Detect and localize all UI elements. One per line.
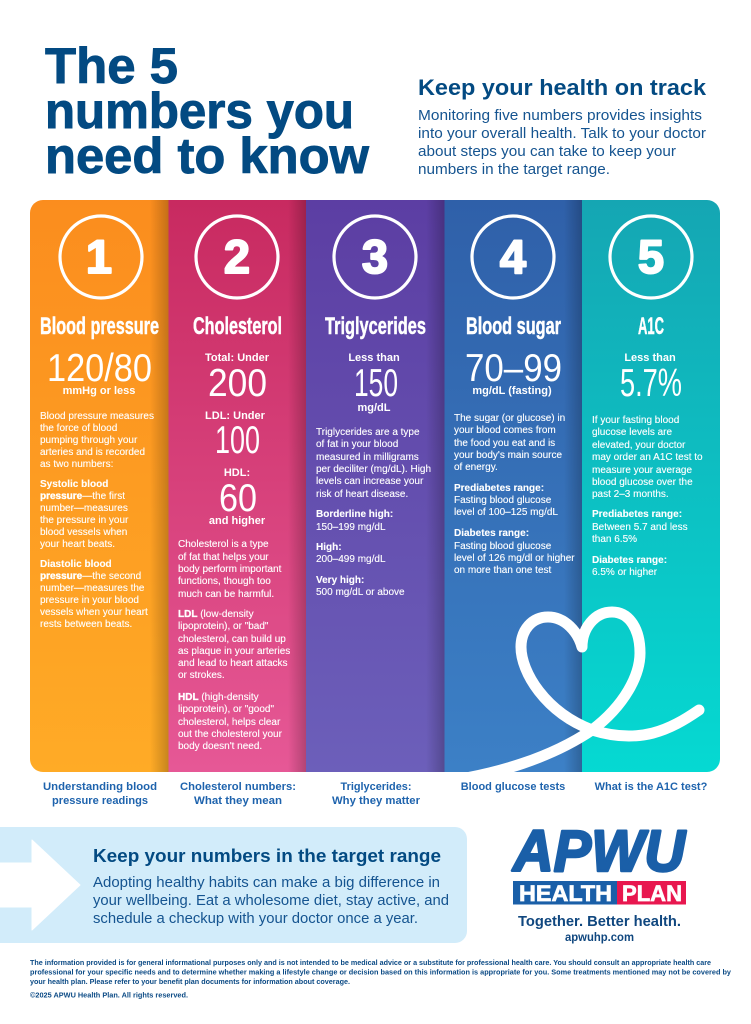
number badge 1: 1 <box>86 230 112 283</box>
website: apwuhp.com <box>565 930 634 944</box>
icon: heart ribbon <box>468 606 704 772</box>
body text: number—measures the <box>40 583 145 594</box>
body text: much can be harmful. <box>178 589 274 600</box>
body text: LDL (low-density <box>178 609 254 620</box>
callout text: your wellbeing. Eat a wholesome diet, stay active, and <box>93 893 449 909</box>
body text: cholesterol, can build up <box>178 634 286 645</box>
number badge 3: 3 <box>362 230 388 283</box>
body text <box>454 413 575 576</box>
body text: levels can increase your <box>316 476 424 487</box>
body text: cholesterol, helps clear <box>178 717 281 728</box>
target: triglycerides: mg/dL <box>358 402 391 414</box>
body text: High: <box>316 542 342 553</box>
callout: target range <box>0 827 467 943</box>
body text: out the cholesterol your <box>178 729 283 740</box>
body text: elevated, your doctor <box>592 440 686 451</box>
link: triglycerides: Triglycerides: <box>340 781 412 793</box>
body text: and lead to heart attacks <box>178 658 288 669</box>
body text: vessels when your heart <box>40 607 148 618</box>
body text: per deciliter (mg/dL). High <box>316 464 431 475</box>
number badge 3 <box>334 216 416 298</box>
body text: number—measures <box>40 503 128 514</box>
body text: pressure—the second <box>40 571 141 582</box>
body text: may order an A1C test to <box>592 452 703 463</box>
body text: the food you eat and is <box>454 438 555 449</box>
intro paragraph: numbers in the target range. <box>418 162 610 178</box>
link: triglycerides <box>332 781 421 807</box>
body text: 200–499 mg/dL <box>316 554 386 565</box>
link: blood glucose: Blood glucose tests <box>461 781 565 793</box>
body text: functions, though too <box>178 576 271 587</box>
title: need to know <box>45 128 369 184</box>
body text: Fasting blood glucose <box>454 495 552 506</box>
body text <box>316 427 431 598</box>
body text: glucose levels are <box>592 427 672 438</box>
body text: lipoprotein), or "bad" <box>178 621 269 632</box>
body text: If your fasting blood <box>592 415 679 426</box>
panel: triglycerides <box>316 216 431 598</box>
body text: on more than one test <box>454 565 552 576</box>
intro text block <box>418 75 707 178</box>
heading: blood sugar: Blood sugar <box>466 313 561 340</box>
target: A1C <box>620 352 682 405</box>
link: cholesterol: Cholesterol numbers: <box>180 781 296 793</box>
heading: triglycerides: Triglycerides <box>325 313 426 340</box>
title: numbers you <box>45 83 354 139</box>
body text: 6.5% or higher <box>592 567 658 578</box>
callout text <box>93 875 449 927</box>
target: LDL: LDL: Under <box>205 410 266 422</box>
logo: APWU Health Plan <box>511 819 687 944</box>
body text: Very high: <box>316 575 364 586</box>
target: A1C: 5.7% <box>620 362 682 405</box>
heading: blood pressure: Blood pressure <box>40 313 159 340</box>
body text: Fasting blood glucose <box>454 541 552 552</box>
disclaimer: your health plan. Please refer to your benefit plan documents for information about coverage. <box>30 977 350 986</box>
number badge 4 <box>472 216 554 298</box>
body text: pressure—the first <box>40 491 125 502</box>
target value: 70–99 <box>465 347 562 390</box>
heading: A1C: A1C <box>638 313 664 340</box>
callout text: schedule a checkup with your doctor once a year. <box>93 911 418 927</box>
link: A1C: What is the A1C test? <box>595 781 708 793</box>
target: A1C: Less than <box>624 352 676 364</box>
target: triglycerides <box>348 352 400 414</box>
body text: Triglycerides are a type <box>316 427 420 438</box>
panel: A1C <box>592 216 703 578</box>
disclaimer: professional for your specific needs and to determine whether making a lifestyle change or decision based on this information is appropriate for you. Some treatments mentioned may not be covered by <box>30 968 732 976</box>
body text: as two numbers: <box>40 459 113 470</box>
body text: level of 100–125 mg/dL <box>454 507 558 518</box>
panel: blood sugar <box>454 216 575 576</box>
disclaimer: ©2025 APWU Health Plan. All rights reserved. <box>30 990 188 1000</box>
link: cholesterol: What they mean <box>194 795 282 807</box>
target: total: Total: Under <box>205 352 270 364</box>
body text: level of 126 mg/dl or higher <box>454 553 575 564</box>
panel backgrounds <box>30 200 720 784</box>
link: cholesterol <box>180 781 296 807</box>
logo: APWU Health Plan: HEALTH <box>519 881 612 906</box>
unit: mmHg or less <box>63 385 135 397</box>
disclaimer <box>30 958 732 1000</box>
body text: Diabetes range: <box>454 528 529 539</box>
body text: as plaque in your arteries <box>178 646 290 657</box>
number badge 5 <box>610 216 692 298</box>
title: The 5 <box>45 38 178 94</box>
body text: your heart beats. <box>40 539 115 550</box>
logo: APWU Health Plan: APWU <box>511 819 687 884</box>
target: LDL <box>205 410 266 462</box>
intro paragraph: Monitoring five numbers provides insights <box>418 108 702 124</box>
body text: 500 mg/dL or above <box>316 587 405 598</box>
target: HDL: HDL: <box>224 467 250 479</box>
body text: body doesn't need. <box>178 741 262 752</box>
panel: blood pressure <box>40 216 159 630</box>
body text: 150–199 mg/dL <box>316 522 386 533</box>
body text: the pressure in your <box>40 515 129 526</box>
body text: body perform important <box>178 564 282 575</box>
body text: blood vessels when <box>40 527 127 538</box>
body text: risk of heart disease. <box>316 489 408 500</box>
body text: your body's main source <box>454 450 563 461</box>
body text: pumping through your <box>40 435 138 446</box>
body text: Borderline high: <box>316 509 393 520</box>
body text: Diastolic blood <box>40 559 112 570</box>
resource links <box>43 781 708 807</box>
body text: of fat that helps your <box>178 552 269 563</box>
body text: your blood comes from <box>454 425 556 436</box>
body text: blood glucose over the <box>592 477 693 488</box>
number badge 1 <box>60 216 142 298</box>
link: blood pressure: pressure readings <box>52 795 148 807</box>
body text: or strokes. <box>178 670 225 681</box>
icon: arrow <box>0 840 80 930</box>
number badge 4: 4 <box>500 230 526 283</box>
body text <box>40 411 154 630</box>
body text: Diabetes range: <box>592 555 667 566</box>
body text: rests between beats. <box>40 619 132 630</box>
unit: mg/dL (fasting) <box>472 385 552 397</box>
body text: lipoprotein), or "good" <box>178 704 274 715</box>
callout heading: Keep your numbers in the target range <box>93 846 441 866</box>
body text: Prediabetes range: <box>454 483 544 494</box>
body text <box>178 539 290 752</box>
body text: Prediabetes range: <box>592 509 682 520</box>
target: triglycerides: Less than <box>348 352 400 364</box>
target value: 120/80 <box>47 347 152 390</box>
body text: arteries and is recorded <box>40 447 145 458</box>
body text: Blood pressure measures <box>40 411 154 422</box>
logo: APWU Health Plan: PLAN <box>622 881 682 906</box>
body text: measure your average <box>592 465 692 476</box>
body text: measured in milligrams <box>316 452 419 463</box>
body text: HDL (high-density <box>178 692 259 703</box>
intro heading: Keep your health on track <box>418 75 707 100</box>
body text: Between 5.7 and less <box>592 522 688 533</box>
number badge 5: 5 <box>638 230 664 283</box>
disclaimer: The information provided is for general informational purposes only and is not intended to be medical advice or a substitute for professional health care. You should consult an appropriate health care <box>30 958 711 967</box>
tagline: Together. Better health. <box>518 914 681 930</box>
link: triglycerides: Why they matter <box>332 795 421 807</box>
body text: of energy. <box>454 462 498 473</box>
body text: pressure in your blood <box>40 595 139 606</box>
target: HDL: and higher <box>209 515 266 527</box>
target: triglycerides: 150 <box>354 362 398 405</box>
target: HDL <box>209 467 266 527</box>
target: HDL: 60 <box>219 477 257 520</box>
body text: Cholesterol is a type <box>178 539 269 550</box>
body text: the force of blood <box>40 423 117 434</box>
heading: cholesterol: Cholesterol <box>193 313 282 340</box>
body text: than 6.5% <box>592 534 637 545</box>
body text: Systolic blood <box>40 479 108 490</box>
target: LDL: 100 <box>215 419 260 462</box>
intro paragraph <box>418 108 706 178</box>
title <box>45 38 369 184</box>
number badge 2: 2 <box>224 230 250 283</box>
intro paragraph: about steps you can take to keep your <box>418 144 676 160</box>
number badge 2 <box>196 216 278 298</box>
body text: of fat in your blood <box>316 439 398 450</box>
body text: The sugar (or glucose) in <box>454 413 565 424</box>
body text <box>592 415 703 578</box>
body text: past 2–3 months. <box>592 489 669 500</box>
intro paragraph: into your overall health. Talk to your doctor <box>418 126 706 142</box>
panel: cholesterol <box>178 216 290 752</box>
callout text: Adopting healthy habits can make a big difference in <box>93 875 440 891</box>
target: total: 200 <box>208 362 267 405</box>
link: blood pressure <box>43 781 157 807</box>
link: blood pressure: Understanding blood <box>43 781 157 793</box>
